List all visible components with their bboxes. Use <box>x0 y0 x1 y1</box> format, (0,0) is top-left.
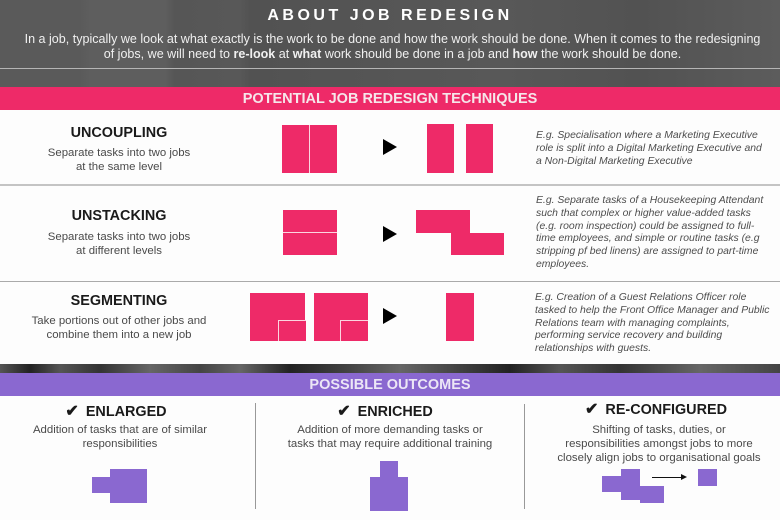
diagram: unstacking before <box>283 210 337 255</box>
outcome: re-configured <box>557 401 761 464</box>
diagram: segmenting before, second job <box>314 293 368 341</box>
heading: UNCOUPLING <box>71 125 167 141</box>
description <box>48 231 190 256</box>
column divider 2 <box>524 404 525 509</box>
description: responsibilities <box>83 438 157 450</box>
example: unstacking <box>536 195 764 270</box>
description: Separate tasks into two jobs <box>48 147 190 159</box>
description: responsibilities amongst jobs to more <box>565 438 753 450</box>
header background <box>0 0 780 87</box>
description: tasks that may require additional training <box>288 438 492 450</box>
outcome: enlarged <box>33 403 207 450</box>
description <box>33 424 207 450</box>
example: uncoupling: E.g. Specialisation where a Marketing Executive <box>536 130 758 141</box>
description <box>557 424 761 464</box>
description: Shifting of tasks, duties, or <box>592 424 726 436</box>
description: at the same level <box>76 160 162 172</box>
technique: unstacking <box>48 208 190 256</box>
technique: uncoupling <box>48 125 190 172</box>
description <box>288 424 492 450</box>
diagram: re-configured after <box>698 469 717 486</box>
diagram: re-configured before <box>602 469 664 503</box>
example: uncoupling: role is split into a Digital Marketing Executive and <box>536 143 762 154</box>
arrow: segmenting <box>383 308 397 324</box>
diagram: enlarged <box>92 469 147 503</box>
example: segmenting: performing service recovery and building <box>535 330 722 341</box>
section heading: outcomes: POSSIBLE OUTCOMES <box>309 377 471 393</box>
description: Take portions out of other jobs and <box>32 315 206 327</box>
panel: outcomes <box>0 396 780 520</box>
example: segmenting: Relations team with managing complaints, <box>535 318 730 328</box>
heading with check: ✔ ENLARGED <box>65 403 167 420</box>
row divider 1 <box>0 184 780 186</box>
arrow: unstacking <box>383 226 397 242</box>
example: unstacking: such that complex or higher value-added tasks <box>536 208 751 219</box>
example: unstacking: employees. <box>536 259 589 270</box>
example: unstacking: time employees, and simple or routine tasks (e.g <box>536 233 760 244</box>
intro text: of jobs, we will need to re-look at what work should be done in a job and how the work should be done. <box>104 47 681 61</box>
intro text: In a job, typically we look at what exactly is the work to be done and how the work should be done. When it comes to the redesigning <box>25 32 760 46</box>
description <box>48 147 190 172</box>
diagram: segmenting before, first job <box>250 293 305 341</box>
outcome: enriched <box>288 403 492 450</box>
example: unstacking: E.g. Separate tasks of a Housekeeping Attendant <box>536 195 763 206</box>
section band: techniques <box>0 87 780 110</box>
diagram: unstacking after <box>416 210 504 255</box>
diagram: enriched <box>370 461 408 511</box>
diagram: uncoupling after <box>427 124 493 173</box>
column divider 1 <box>255 403 256 509</box>
description: closely align jobs to organisational goals <box>557 452 761 464</box>
technique: segmenting <box>32 293 206 340</box>
heading with check: ✔ ENRICHED <box>337 403 433 420</box>
diagram: uncoupling before <box>282 125 337 173</box>
heading: SEGMENTING <box>71 293 167 309</box>
title: ABOUT JOB REDESIGN <box>267 7 513 24</box>
example: segmenting: tasked to help the Front Office Manager and Public <box>535 305 770 316</box>
panel: techniques <box>0 110 780 364</box>
description: combine them into a new job <box>46 328 192 340</box>
section band: outcomes <box>0 373 780 396</box>
heading: UNSTACKING <box>72 208 166 224</box>
description: Addition of tasks that are of similar <box>33 424 207 436</box>
example: uncoupling: a Non-Digital Marketing Executive <box>536 156 693 166</box>
section heading: techniques: POTENTIAL JOB REDESIGN TECHNIQUES <box>243 91 537 107</box>
example: unstacking: stripping pf bed linens) are assigned to part-time <box>536 246 758 257</box>
row divider 2 <box>0 281 780 282</box>
description: at different levels <box>76 244 162 256</box>
example: uncoupling <box>536 130 762 166</box>
example: unstacking: (e.g. room inspection) could be assigned to full- <box>536 220 754 232</box>
header rule <box>0 68 780 69</box>
diagram: segmenting after <box>446 293 474 341</box>
arrow: uncoupling <box>383 139 397 155</box>
example: segmenting <box>534 292 770 354</box>
example: segmenting: E.g. Creation of a Guest Relations Officer role <box>535 292 746 303</box>
description: Addition of more demanding tasks or <box>297 424 483 436</box>
intro text <box>25 32 760 61</box>
photo strip <box>0 364 780 373</box>
description: Separate tasks into two jobs <box>48 231 190 243</box>
description <box>32 315 206 340</box>
heading with check: ✔ RE-CONFIGURED <box>585 401 727 418</box>
arrow: re-configured <box>652 474 687 480</box>
example: segmenting: relationships with guests. <box>535 343 651 354</box>
